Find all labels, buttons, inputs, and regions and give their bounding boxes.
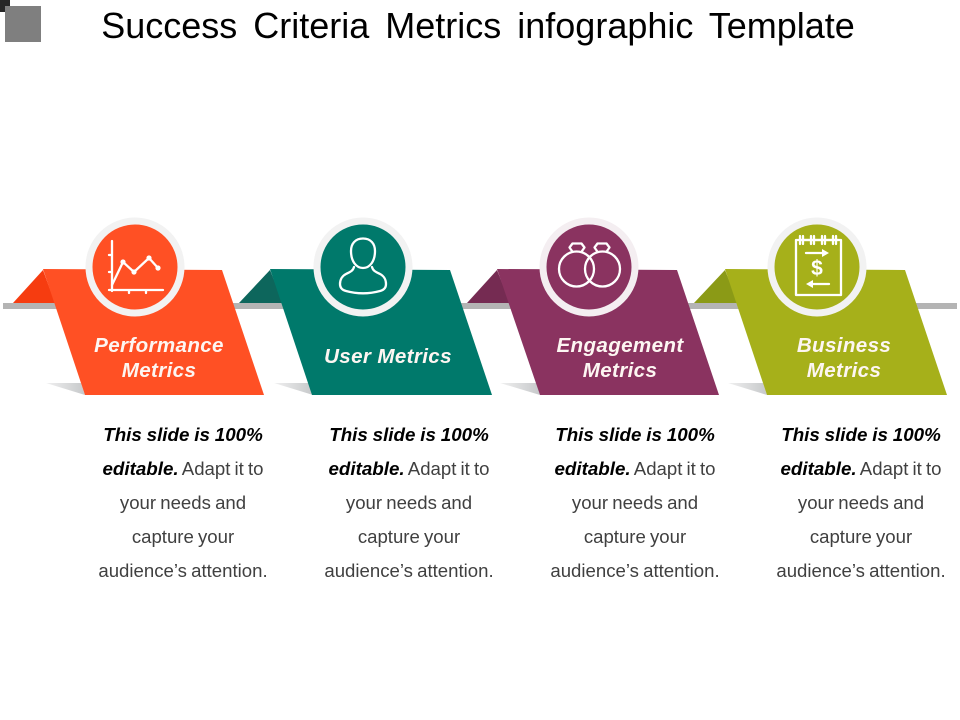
shadow: business bbox=[728, 383, 767, 395]
heading: engagement metrics: Engagement bbox=[556, 334, 684, 357]
text block: user: editable. Adapt it to bbox=[328, 458, 490, 479]
fold: user bbox=[239, 270, 283, 303]
ribbon: business bbox=[725, 269, 947, 395]
icon: notepad with dollar: $ bbox=[811, 257, 823, 280]
text block: performance: capture your bbox=[132, 526, 234, 547]
text block: engagement: editable. Adapt it to bbox=[554, 458, 716, 479]
text block: user: capture your bbox=[358, 526, 460, 547]
text block: user: audience’s attention. bbox=[324, 560, 494, 581]
ribbon: user bbox=[270, 269, 492, 395]
shadow: user bbox=[274, 383, 313, 395]
text block: performance: editable. Adapt it to bbox=[102, 458, 264, 479]
panel: user metrics bbox=[239, 221, 492, 395]
fold: business bbox=[694, 270, 738, 303]
text block: business: This slide is 100% bbox=[781, 424, 941, 445]
text block: user: This slide is 100% bbox=[329, 424, 489, 445]
icon: rings bbox=[543, 221, 635, 313]
heading: business metrics: Metrics bbox=[807, 359, 881, 382]
text block: business: editable. Adapt it to bbox=[780, 458, 942, 479]
text block: business: your needs and bbox=[798, 492, 924, 513]
icon: person bbox=[317, 221, 409, 313]
text block: user: your needs and bbox=[346, 492, 472, 513]
text block: performance: audience’s attention. bbox=[98, 560, 268, 581]
fold: engagement bbox=[467, 270, 510, 303]
text block: performance: your needs and bbox=[120, 492, 246, 513]
icon: line chart bbox=[89, 221, 181, 313]
heading: user metrics: User Metrics bbox=[324, 345, 452, 368]
shadow: performance bbox=[46, 383, 85, 395]
text block: performance: This slide is 100% bbox=[103, 424, 263, 445]
panel: engagement metrics bbox=[467, 221, 719, 395]
panel: business metrics bbox=[694, 221, 947, 395]
text block: engagement: capture your bbox=[584, 526, 686, 547]
text block: business: capture your bbox=[810, 526, 912, 547]
horizontal grey bar bbox=[3, 303, 957, 309]
icon: notepad with dollar bbox=[771, 221, 863, 313]
ribbon: performance bbox=[43, 269, 264, 395]
heading: business metrics: Business bbox=[797, 334, 891, 357]
title: Success Criteria Metrics infographic Template bbox=[101, 5, 855, 46]
text block: engagement: your needs and bbox=[572, 492, 698, 513]
ribbon: engagement bbox=[497, 269, 719, 395]
heading: engagement metrics: Metrics bbox=[583, 359, 657, 382]
text block: business: audience’s attention. bbox=[776, 560, 946, 581]
logo placeholder bbox=[0, 0, 41, 42]
shadow: engagement bbox=[500, 383, 540, 395]
heading: performance metrics: Performance bbox=[94, 334, 224, 357]
text block: engagement: audience’s attention. bbox=[550, 560, 720, 581]
heading: performance metrics: Metrics bbox=[122, 359, 196, 382]
text block: engagement: This slide is 100% bbox=[555, 424, 715, 445]
panel: performance metrics bbox=[13, 221, 264, 395]
fold: performance bbox=[13, 270, 55, 303]
